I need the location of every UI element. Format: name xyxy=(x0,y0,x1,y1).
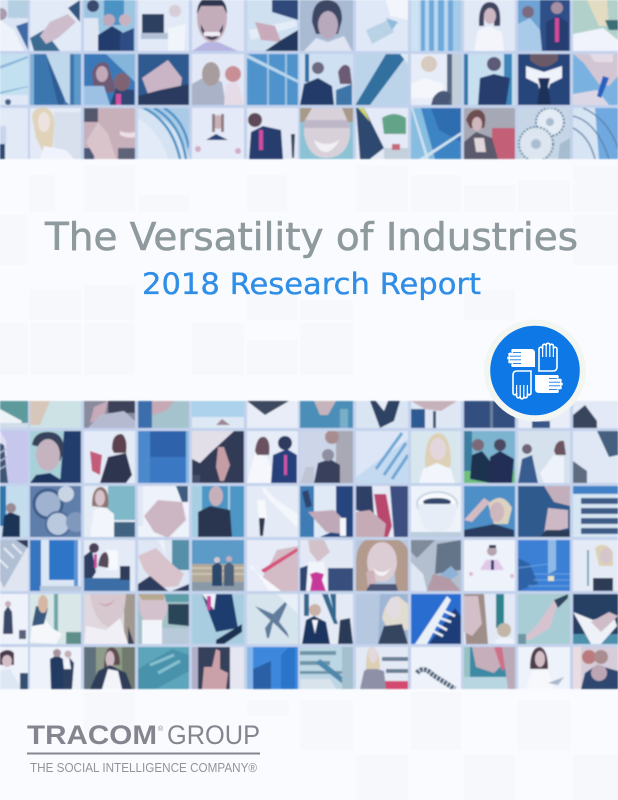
row 4 xyxy=(0,400,29,428)
row 7 xyxy=(0,539,29,592)
logo: TRACOM Group xyxy=(27,720,260,775)
title: The Versatility of Industries xyxy=(44,215,578,260)
photo grid: bottom band xyxy=(0,401,618,689)
logo rule xyxy=(27,752,260,754)
logo wordmark: GROUP: GROUP xyxy=(167,720,260,750)
row 6 xyxy=(0,485,27,538)
row 8 xyxy=(0,594,28,644)
row 1 xyxy=(0,0,29,52)
faint photo grid: footer band xyxy=(84,692,618,800)
row 2 xyxy=(0,54,28,106)
icon: four interlocking hands xyxy=(484,320,586,422)
photo grid: top band xyxy=(0,0,618,161)
subtitle: 2018 Research Report xyxy=(142,267,481,301)
hand: top left, filled xyxy=(507,349,535,367)
row 5 xyxy=(0,432,27,484)
hand: bottom left, outlined xyxy=(513,371,531,399)
hand: bottom right, filled xyxy=(535,375,563,393)
logo registered mark: ® xyxy=(158,725,164,733)
logo tagline: THE SOCIAL INTELLIGENCE COMPANY® xyxy=(30,761,258,775)
logo wordmark: TRACOM: TRACOM xyxy=(27,720,157,750)
row 3 xyxy=(0,108,28,160)
row 9 xyxy=(0,646,29,690)
faint photo grid: middle band xyxy=(0,165,618,375)
hand: top right, outlined xyxy=(539,343,557,371)
